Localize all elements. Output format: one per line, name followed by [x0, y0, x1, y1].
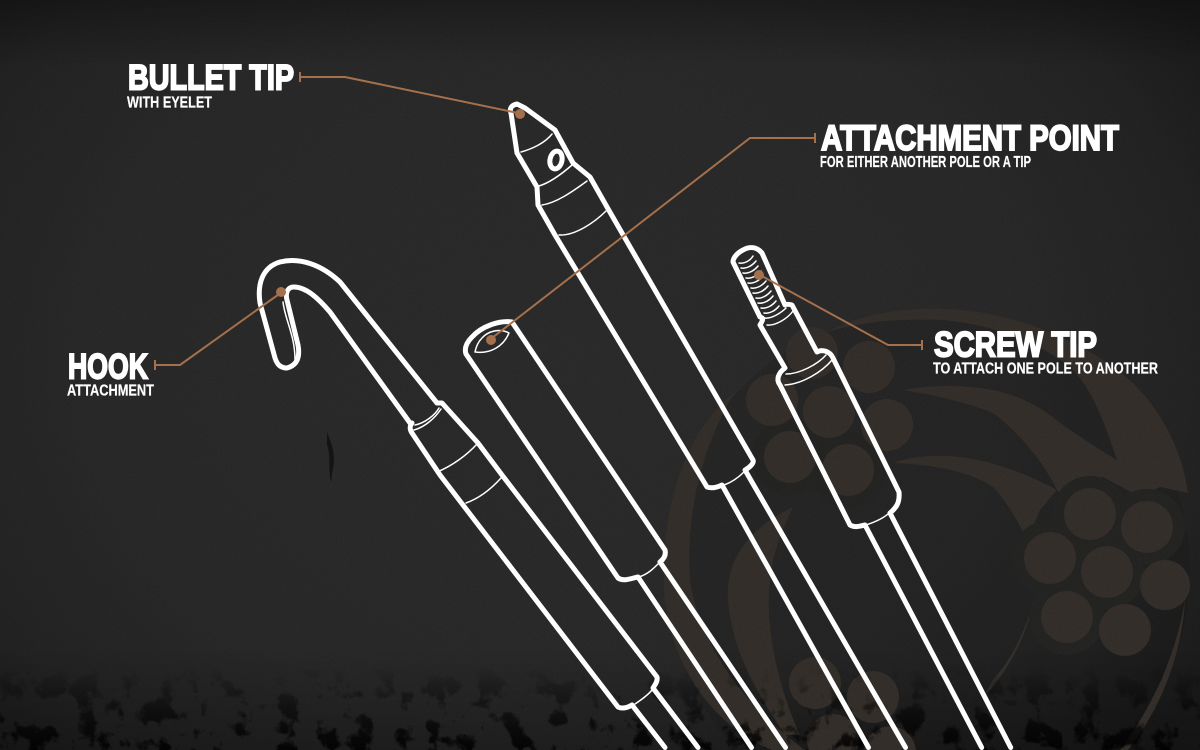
label: bullet tip: BULLET TIP	[128, 58, 294, 98]
screw threads	[739, 256, 889, 525]
label: bullet tip	[127, 58, 525, 119]
pole: bullet tip	[510, 104, 906, 748]
label: attachment point	[486, 118, 1119, 345]
bullet outline	[510, 104, 906, 748]
logo dot clusters	[746, 327, 1190, 750]
label: screw tip	[754, 270, 1158, 378]
label: hook	[67, 287, 286, 400]
leader: hook	[155, 287, 286, 370]
leader: screw tip	[754, 270, 922, 350]
screw outline	[733, 248, 1011, 748]
pole: screw tip	[733, 248, 1011, 748]
label: hook: HOOK	[68, 346, 148, 386]
logo dark halos	[752, 419, 1185, 655]
leader: attachment point	[486, 133, 815, 345]
label: hook: ATTACHMENT	[67, 382, 154, 400]
hook outline	[259, 261, 698, 748]
bullet eyelet	[548, 150, 564, 170]
logo watermark	[664, 309, 1190, 750]
tube outline	[465, 322, 786, 748]
leader: bullet tip	[300, 72, 525, 119]
label: attachment point: FOR EITHER ANOTHER POLE OR A TIP	[820, 154, 1031, 171]
tube opening	[475, 331, 509, 352]
label: bullet tip: WITH EYELET	[127, 94, 212, 112]
hook details	[283, 302, 652, 704]
label: screw tip: SCREW TIP	[934, 324, 1097, 364]
grunge texture	[0, 324, 1199, 750]
label: attachment point: ATTACHMENT POINT	[821, 118, 1119, 158]
bullet bands	[521, 134, 745, 485]
pole: hook	[259, 261, 698, 748]
pole: open tube	[465, 322, 786, 748]
